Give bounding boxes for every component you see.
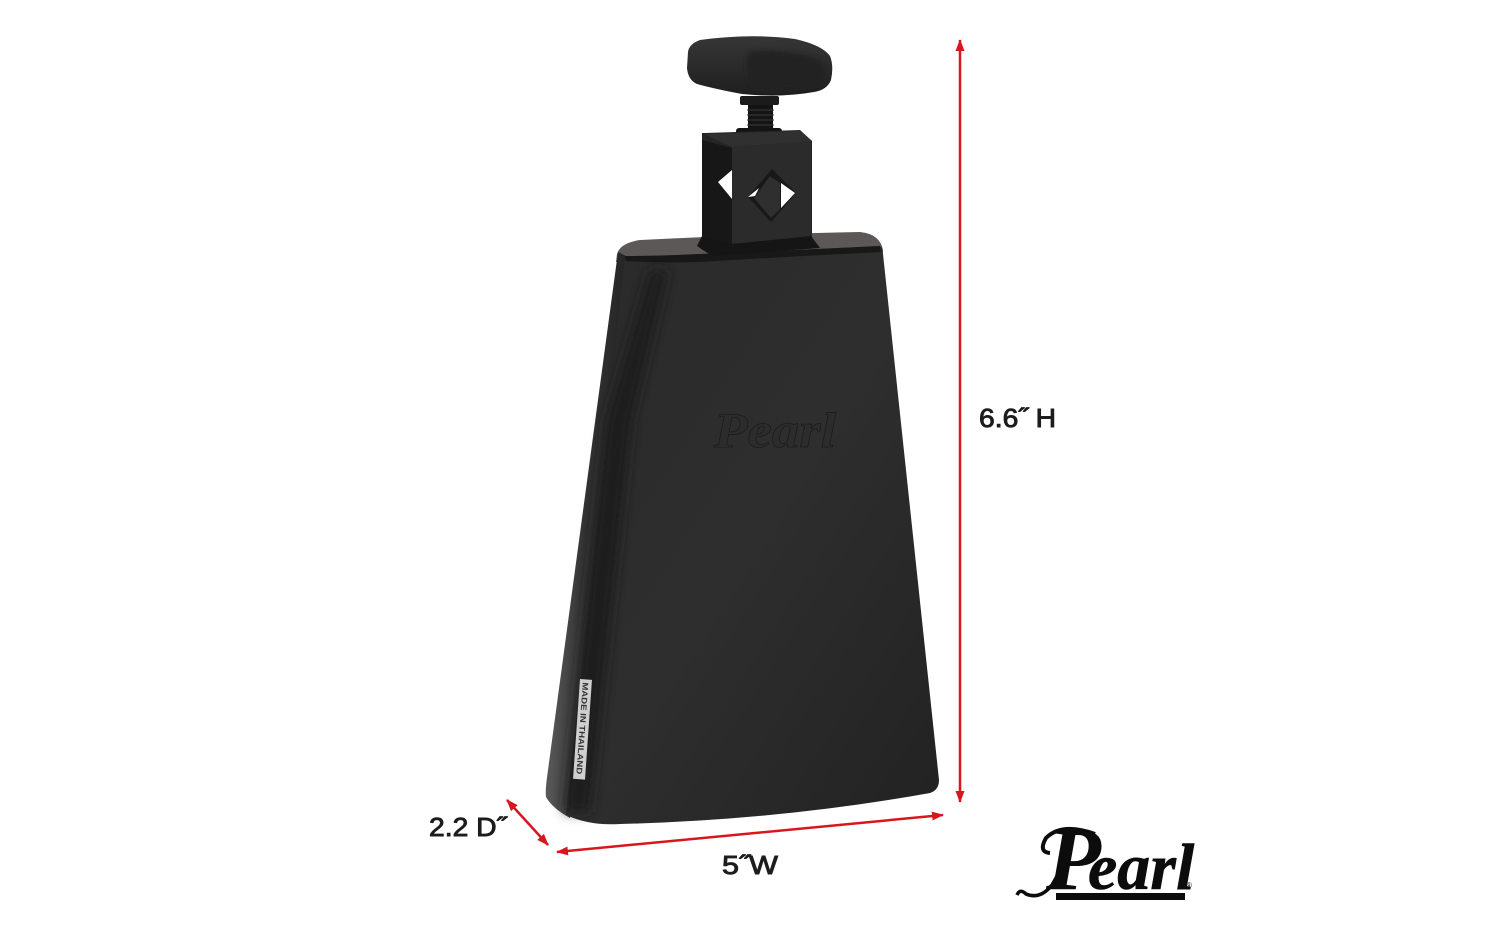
bell body: [546, 232, 939, 824]
Pearl logo: P: [1045, 810, 1102, 909]
arrow: depth: [507, 800, 548, 845]
label: depth: 2.2 D˝: [429, 812, 509, 842]
bell top edge shadow: [625, 246, 881, 262]
arrow: width: [557, 815, 943, 852]
bell side panel: [546, 252, 630, 818]
arrow: height: [959, 40, 961, 802]
bracket weld base: [697, 236, 820, 256]
cowbell illustration: [546, 36, 939, 824]
label: width: 5˝W: [722, 850, 779, 880]
made in Thailand label: [573, 679, 592, 780]
Pearl logo: earl: [1088, 831, 1195, 904]
icon: wing knob: [687, 36, 832, 137]
embossed Pearl logo: Pearl: [713, 402, 836, 458]
Pearl logo: ®: [1186, 881, 1192, 890]
icon: clamp bracket: [697, 130, 820, 256]
made in Thailand label: MADE IN THAILAND: [574, 682, 590, 775]
bell soft vertical shading: [564, 270, 668, 812]
Pearl logo: [1017, 810, 1195, 909]
label: height: 6.6˝ H: [979, 403, 1056, 433]
bell top rim: [616, 232, 883, 262]
bell front face: [566, 246, 939, 824]
